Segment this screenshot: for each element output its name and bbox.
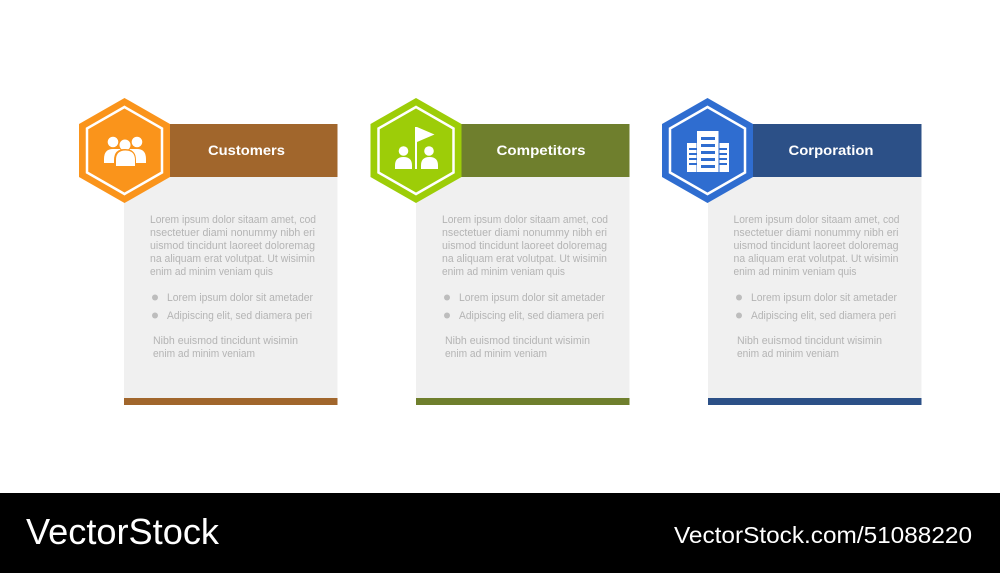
bullet list: competitors: Lorem ipsum dolor sit ametader bbox=[459, 292, 605, 304]
body text: competitors: na aliquam erat volutpat. Ut wisimin bbox=[442, 253, 607, 265]
body text: customers: uismod tincidunt laoreet doloremag bbox=[150, 240, 315, 252]
bullet list: competitors: Adipiscing elit, sed diamera peri bbox=[459, 310, 604, 322]
body text: competitors: enim ad minim veniam quis bbox=[442, 266, 565, 278]
bullet list: competitors bbox=[444, 292, 605, 322]
body text: corporation: enim ad minim veniam quis bbox=[734, 266, 857, 278]
icon: orange hexagon bbox=[79, 98, 170, 203]
bullet list: customers bbox=[152, 292, 313, 322]
bullet list: corporation bbox=[736, 292, 897, 322]
bullet list: customers: Lorem ipsum dolor sit ametader bbox=[167, 292, 313, 304]
panel: corporation bbox=[662, 98, 922, 405]
card body: customers bbox=[124, 177, 338, 405]
body text: customers: Lorem ipsum dolor sitaam amet, cod bbox=[150, 214, 316, 226]
bullet list: corporation: Lorem ipsum dolor sit ametader bbox=[751, 292, 897, 304]
header bar: corporation bbox=[749, 124, 922, 177]
header bar: customers bbox=[165, 124, 338, 177]
card body: corporation bbox=[708, 177, 922, 405]
body text: corporation: Lorem ipsum dolor sitaam amet, cod bbox=[734, 214, 900, 226]
heading: corporation: Corporation bbox=[788, 142, 874, 158]
body text: customers: na aliquam erat volutpat. Ut wisimin bbox=[150, 253, 315, 265]
bullet list: corporation: Adipiscing elit, sed diamera peri bbox=[751, 310, 896, 322]
header bar: competitors bbox=[457, 124, 630, 177]
closing text: customers: Nibh euismod tincidunt wisimin bbox=[153, 335, 298, 347]
icon: office buildings bbox=[687, 131, 729, 172]
bullet list: customers: Adipiscing elit, sed diamera peri bbox=[167, 310, 312, 322]
closing text: customers bbox=[153, 335, 298, 360]
closing text: corporation bbox=[737, 335, 882, 360]
body text: competitors: uismod tincidunt laoreet doloremag bbox=[442, 240, 607, 252]
closing text: competitors: Nibh euismod tincidunt wisimin bbox=[445, 335, 590, 347]
body text: competitors bbox=[442, 214, 608, 278]
body text: corporation: na aliquam erat volutpat. Ut wisimin bbox=[734, 253, 898, 265]
footer url text: VectorStock.com/51088220 bbox=[674, 522, 972, 548]
bottom bar: competitors bbox=[416, 398, 630, 405]
body text: corporation: nsectetuer diami nonummy nibh eri bbox=[734, 227, 898, 239]
footer logo text: VectorStock bbox=[26, 511, 220, 552]
body text: corporation bbox=[734, 214, 900, 278]
footer band bbox=[0, 493, 1000, 573]
card body: competitors bbox=[416, 177, 630, 405]
body text: customers: enim ad minim veniam quis bbox=[150, 266, 273, 278]
closing text: corporation: enim ad minim veniam bbox=[737, 348, 839, 360]
closing text: competitors bbox=[445, 335, 590, 360]
heading: customers: Customers bbox=[208, 142, 285, 158]
body text: customers: nsectetuer diami nonummy nibh eri bbox=[150, 227, 315, 239]
closing text: customers: enim ad minim veniam bbox=[153, 348, 255, 360]
body text: customers bbox=[150, 214, 316, 278]
icon: group of people bbox=[104, 137, 146, 168]
body text: competitors: nsectetuer diami nonummy nibh eri bbox=[442, 227, 607, 239]
body text: corporation: uismod tincidunt laoreet doloremag bbox=[734, 240, 898, 252]
heading: competitors: Competitors bbox=[496, 142, 586, 158]
panel: customers bbox=[79, 98, 338, 405]
closing text: competitors: enim ad minim veniam bbox=[445, 348, 547, 360]
icon: green hexagon bbox=[370, 98, 462, 203]
icon: blue hexagon bbox=[662, 98, 753, 203]
bottom bar: customers bbox=[124, 398, 338, 405]
closing text: corporation: Nibh euismod tincidunt wisimin bbox=[737, 335, 882, 347]
bottom bar: corporation bbox=[708, 398, 922, 405]
body text: competitors: Lorem ipsum dolor sitaam amet, cod bbox=[442, 214, 608, 226]
panel: competitors bbox=[370, 98, 630, 405]
icon: two people and flag bbox=[395, 127, 438, 169]
